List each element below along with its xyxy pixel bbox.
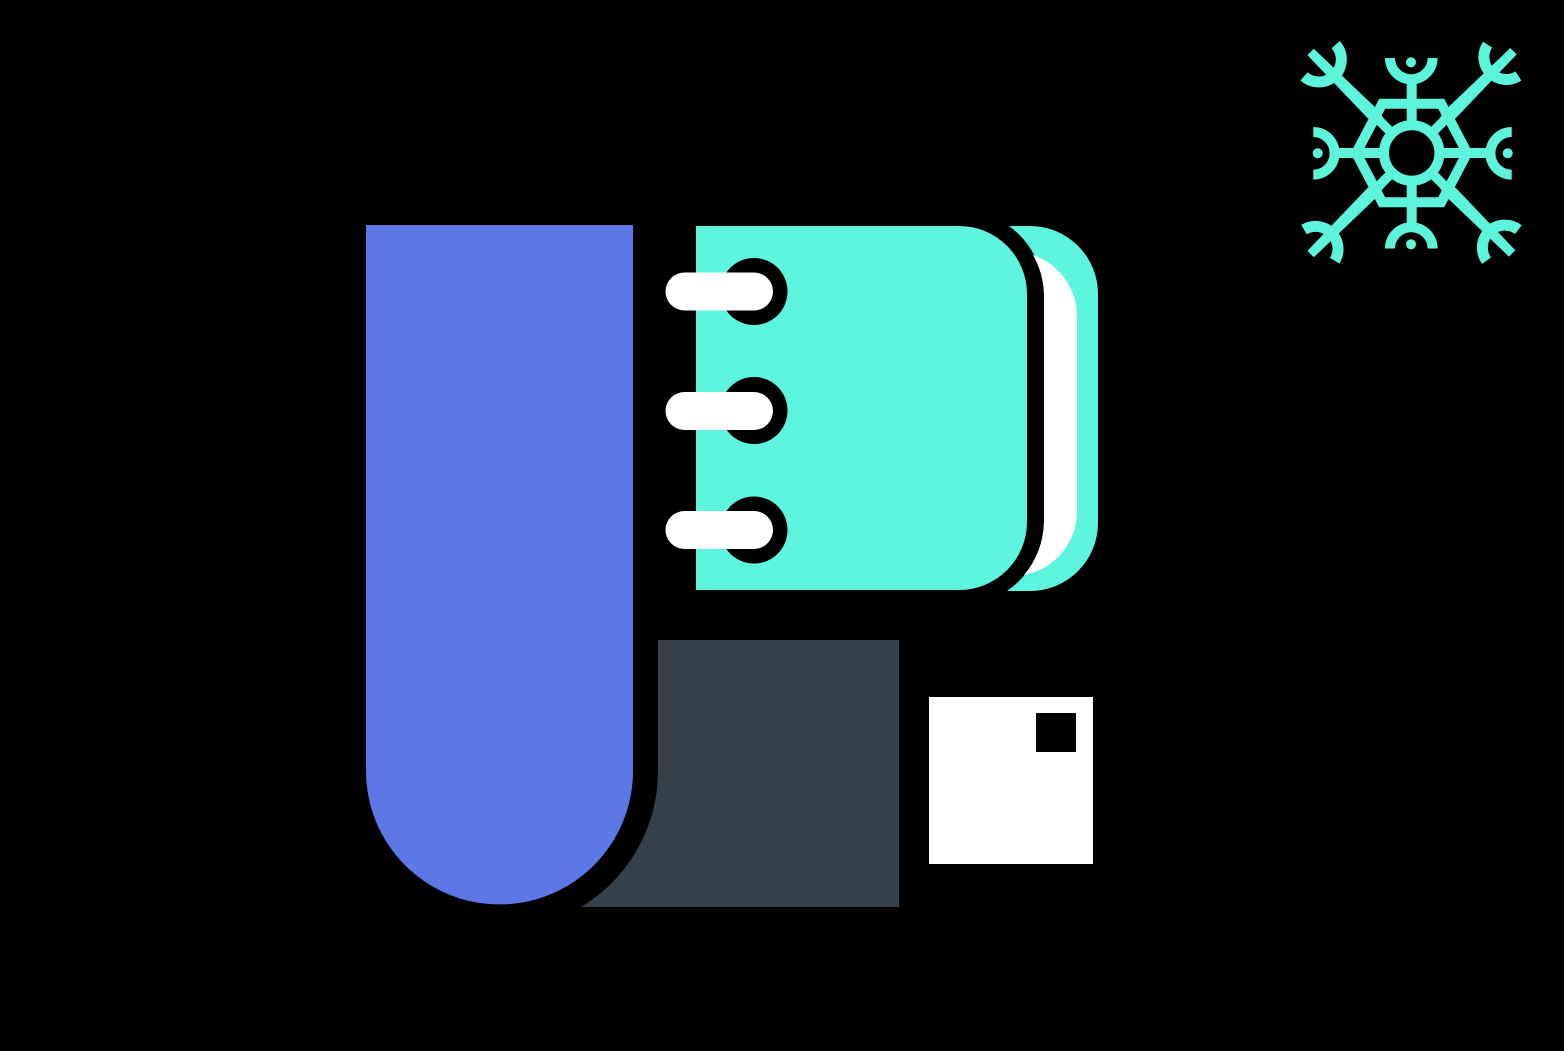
icon: white square with black notch [929, 697, 1093, 864]
spiral binding ring 3 [666, 496, 788, 564]
notebook front cover [696, 226, 1027, 590]
spiral binding ring 2 [666, 377, 788, 444]
panel: dark slate shape [581, 640, 899, 907]
snowflake dots [1313, 57, 1513, 249]
notebook back cover [1007, 226, 1098, 591]
snowflake hexagon [1356, 104, 1467, 202]
icon: spiral notebook [666, 226, 1098, 591]
panel: blue rounded bar [366, 225, 633, 904]
snowflake straight spokes [1339, 76, 1487, 228]
snowflake axis forks [1313, 58, 1512, 248]
snowflake centre ring [1384, 125, 1439, 181]
snowflake diagonal arms [1306, 47, 1518, 259]
icon: snowflake [1304, 45, 1518, 261]
spiral binding ring 1 [666, 258, 788, 325]
notebook white pages [1024, 255, 1077, 575]
snowflake diagonal forks [1304, 45, 1518, 261]
